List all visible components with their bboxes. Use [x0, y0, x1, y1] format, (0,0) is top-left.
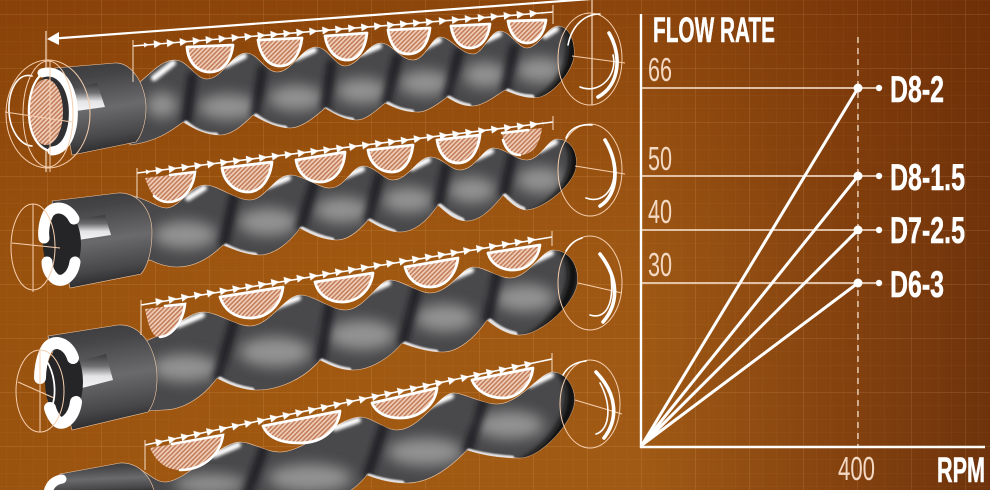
front ring with cross-section hatch — [9, 72, 73, 151]
hatched cross-sections — [145, 128, 542, 202]
drive head cylinder — [55, 63, 146, 155]
chart title: FLOW RATE — [653, 11, 775, 50]
y axis values — [648, 51, 672, 283]
right end circle — [558, 13, 625, 105]
400 RPM dashed guide — [857, 37, 859, 446]
screw body — [120, 370, 574, 490]
flow direction arrows — [133, 5, 553, 82]
panel: first screw rotor — [5, 5, 625, 172]
front ring edge — [48, 479, 62, 490]
axes — [641, 14, 985, 447]
y axis values: 50 — [648, 140, 672, 177]
right end circle — [560, 360, 622, 448]
panel: second screw rotor — [11, 116, 625, 292]
hatched cross-sections — [187, 20, 546, 72]
drive head cylinder — [45, 463, 155, 490]
y axis values: 66 — [648, 51, 672, 88]
y axis values: 30 — [648, 246, 672, 283]
overall length dimension arrow — [46, 0, 592, 172]
left construction circles — [5, 60, 90, 172]
front C-shaped ring — [43, 208, 81, 280]
screw body — [130, 24, 574, 145]
y axis values: 40 — [648, 193, 672, 230]
hatched cross-sections — [145, 245, 540, 337]
value gridlines — [641, 88, 879, 283]
keyway slot — [72, 83, 105, 111]
line end dots — [854, 84, 882, 288]
panel: fourth screw rotor — [45, 353, 622, 490]
series labels: D6-3 — [890, 264, 944, 305]
right end circle — [558, 236, 622, 330]
keyway slot — [70, 215, 111, 240]
x axis value: 400 — [838, 450, 875, 487]
series labels — [890, 69, 965, 305]
screw body — [130, 138, 576, 267]
flow direction arrows — [141, 231, 552, 335]
left construction circle — [16, 350, 64, 432]
keyway slot — [72, 354, 113, 388]
series labels: D8-2 — [890, 69, 944, 110]
screw body — [130, 248, 577, 412]
hatched cross-sections — [150, 368, 533, 470]
front C-shaped ring — [40, 343, 83, 423]
drive head cylinder — [48, 325, 157, 430]
flow direction arrows — [137, 116, 553, 198]
flow rate chart — [641, 11, 985, 490]
left construction circle — [11, 204, 60, 292]
flow direction arrows — [145, 353, 552, 470]
drive head cylinder — [52, 193, 152, 288]
panel: third screw rotor — [16, 231, 622, 432]
flow rate lines — [642, 88, 858, 445]
right end circle — [558, 124, 625, 216]
